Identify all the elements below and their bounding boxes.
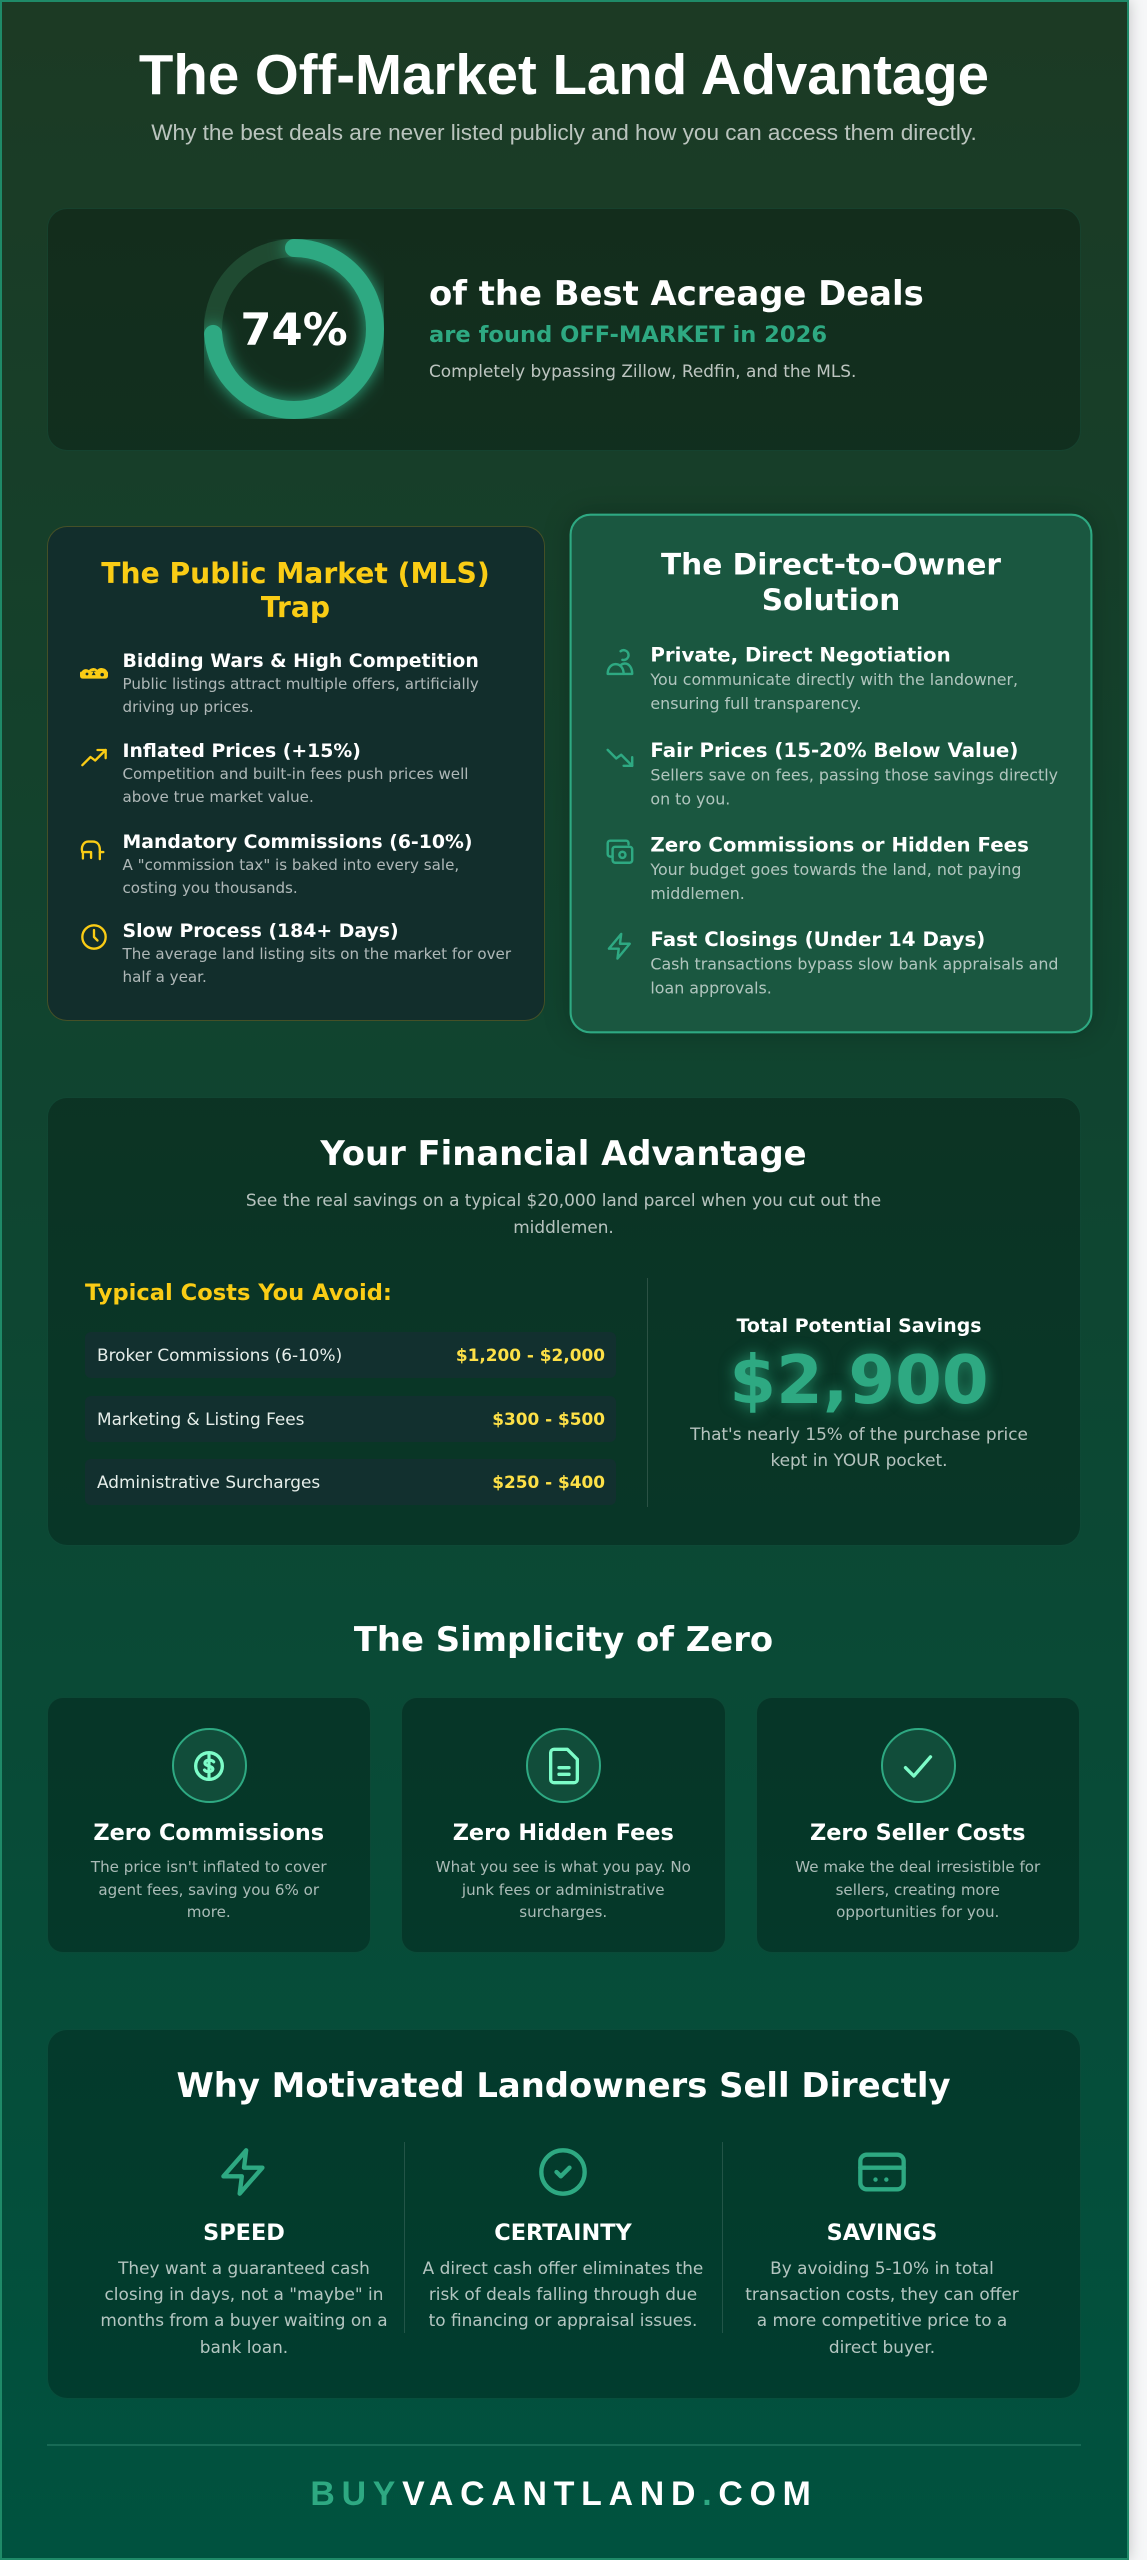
icon: commissions — [80, 840, 104, 860]
text: months from a buyer waiting on a — [100, 2310, 388, 2330]
savings figure: $2,900 — [729, 1341, 989, 1419]
row: marketing fees: Marketing & Listing Fees — [97, 1409, 304, 1429]
card text: junk fees or administrative — [462, 1881, 665, 1899]
text: Fair Prices (15-20% Below Value) — [650, 740, 1018, 762]
statistic headline: of the Best Acreage Deals — [429, 274, 924, 313]
heading: Solution — [762, 583, 900, 618]
text: transaction costs, they can offer — [745, 2284, 1019, 2304]
text — [723, 2255, 1041, 2360]
icon: trending up — [81, 748, 107, 766]
description: ensuring full transparency. — [650, 694, 861, 713]
heading: financial advantage: Your Financial Advantage — [320, 1134, 807, 1173]
savings label: Total Potential Savings — [737, 1314, 981, 1336]
description: Cash transactions bypass slow bank appraisals and — [650, 955, 1058, 974]
icon: document — [526, 1728, 601, 1803]
panel: 74 percent statistic — [46, 208, 1081, 451]
description — [650, 766, 1058, 809]
description — [122, 945, 512, 986]
text: Zero Commissions or Hidden Fees — [650, 835, 1029, 857]
card title: Zero Seller Costs — [810, 1820, 1026, 1846]
description: You communicate directly with the landowner, — [650, 670, 1018, 689]
title: CERTAINTY — [494, 2220, 632, 2246]
icon: check circle — [539, 2148, 587, 2196]
card: zero hidden fees — [401, 1697, 726, 1953]
text: Private, Direct Negotiation — [650, 645, 951, 667]
savings note: That's nearly 15% of the purchase price — [690, 1424, 1028, 1444]
row: broker commissions: Broker Commissions (6-10%) — [97, 1345, 342, 1365]
card: zero seller costs — [756, 1697, 1080, 1953]
heading: why landowners sell directly: Why Motivated Landowners Sell Directly — [176, 2066, 951, 2105]
description: costing you thousands. — [122, 879, 298, 897]
item: fair prices — [606, 740, 1058, 809]
description: Competition and built-in fees push prices well — [122, 765, 468, 783]
card title: Zero Hidden Fees — [453, 1820, 674, 1846]
card text: sellers, creating more — [836, 1881, 1000, 1899]
panel: financial advantage — [46, 1097, 1081, 1546]
icon: clock — [81, 924, 107, 950]
icon: bidding — [80, 668, 108, 679]
financial intro text: See the real savings on a typical $20,000 land parcel when you cut out the — [246, 1190, 881, 1210]
card text: The price isn't inflated to cover — [91, 1858, 327, 1876]
row: broker commissions — [85, 1332, 616, 1378]
statistic note: Completely bypassing Zillow, Redfin, and the MLS. — [429, 361, 856, 381]
text: Slow Process (184+ Days) — [122, 921, 399, 942]
card text: more. — [187, 1903, 231, 1921]
description — [650, 955, 1058, 998]
text: a more competitive price to a — [757, 2310, 1007, 2330]
statistic subheading: are found OFF-MARKET in 2026 — [429, 322, 827, 348]
financial intro text — [246, 1190, 881, 1237]
text: A direct cash offer eliminates the — [423, 2258, 703, 2278]
icon: banknotes — [606, 840, 634, 864]
description: loan approvals. — [650, 979, 772, 998]
savings note — [690, 1424, 1028, 1470]
icon: lightning — [608, 932, 631, 960]
row: admin surcharges: Administrative Surcharges — [97, 1472, 320, 1492]
heading: The Direct-to-Owner — [661, 547, 1001, 582]
text: Inflated Prices (+15%) — [122, 741, 361, 762]
card text — [90, 1858, 327, 1921]
panel: public market trap — [46, 526, 544, 1021]
heading — [661, 547, 1001, 618]
card text: surcharges. — [519, 1903, 607, 1921]
text — [422, 2258, 703, 2330]
description — [122, 856, 459, 897]
column: speed — [100, 2148, 388, 2357]
description: Sellers save on fees, passing those savings directly — [650, 766, 1058, 785]
card title: Zero Commissions — [93, 1820, 324, 1846]
card text: We make the deal irresistible for — [795, 1858, 1040, 1876]
savings note: kept in YOUR pocket. — [770, 1450, 948, 1470]
item: inflated prices — [81, 741, 468, 806]
icon: check — [880, 1728, 956, 1803]
column: savings — [745, 2152, 1019, 2357]
row: broker commissions: $1,200 - $2,000 — [456, 1345, 605, 1365]
description: driving up prices. — [122, 698, 254, 716]
heading: Trap — [261, 591, 330, 624]
subheading: costs you avoid: Typical Costs You Avoid: — [85, 1280, 392, 1306]
divider — [647, 1278, 648, 1507]
item: zero commissions — [606, 835, 1029, 903]
text: bank loan. — [200, 2337, 288, 2357]
financial intro text: middlemen. — [513, 1217, 614, 1237]
panel: why landowners sell directly — [46, 2029, 1081, 2399]
donut chart: 74%: 74% — [240, 303, 347, 356]
description: on to you. — [650, 790, 730, 809]
text: to financing or appraisal issues. — [429, 2310, 697, 2330]
text: direct buyer. — [829, 2337, 935, 2357]
text: risk of deals falling through due — [429, 2284, 697, 2304]
card text — [436, 1858, 691, 1921]
footer divider — [47, 2444, 1081, 2446]
title: SAVINGS — [827, 2220, 937, 2246]
title: SPEED — [203, 2220, 285, 2246]
icon: dollar coin — [172, 1728, 246, 1803]
description: middlemen. — [650, 884, 745, 903]
item: fast closings — [608, 929, 1058, 998]
card: zero commissions — [46, 1697, 371, 1953]
card text: agent fees, saving you 6% or — [98, 1881, 319, 1899]
description: A "commission tax" is baked into every sale, — [122, 856, 459, 874]
text: Bidding Wars & High Competition — [122, 651, 479, 672]
divider — [404, 2142, 405, 2333]
item: private negotiation — [606, 645, 1018, 713]
row: marketing fees: $300 - $500 — [492, 1409, 605, 1429]
heading — [101, 557, 490, 624]
description — [650, 670, 1018, 713]
card text: What you see is what you pay. No — [436, 1858, 691, 1876]
cost table — [85, 1332, 616, 1505]
row: admin surcharges — [85, 1459, 616, 1505]
title: The Off-Market Land Advantage — [139, 43, 989, 106]
divider — [722, 2142, 723, 2333]
item: slow process — [81, 921, 512, 986]
item: bidding wars — [80, 651, 479, 716]
column: certainty — [422, 2148, 703, 2330]
icon: trending down — [606, 748, 634, 768]
icon: lightning — [221, 2148, 265, 2196]
description — [122, 675, 479, 716]
panel: direct-to-owner solution — [570, 514, 1092, 1033]
icon: person — [606, 648, 634, 676]
card text — [795, 1858, 1040, 1921]
text: By avoiding 5-10% in total — [770, 2258, 994, 2278]
description — [122, 765, 468, 806]
footer logo: BUYVACANTLAND.COM — [310, 2475, 818, 2513]
text: Mandatory Commissions (6-10%) — [122, 832, 472, 853]
description: above true market value. — [122, 788, 314, 806]
text: They want a guaranteed cash — [118, 2258, 370, 2278]
row: admin surcharges: $250 - $400 — [492, 1472, 605, 1492]
text: Fast Closings (Under 14 Days) — [650, 929, 985, 951]
description: The average land listing sits on the market for over — [122, 945, 511, 963]
donut chart: 74% — [204, 239, 384, 419]
item: mandatory commissions — [80, 832, 472, 897]
text: closing in days, not a "maybe" in — [105, 2284, 383, 2304]
text — [100, 2258, 388, 2357]
icon: card — [856, 2146, 908, 2198]
subtitle: Why the best deals are never listed publicly and how you can access them directly. — [151, 120, 977, 145]
card text: opportunities for you. — [836, 1903, 999, 1921]
description: half a year. — [122, 968, 207, 986]
row: marketing fees — [85, 1396, 616, 1442]
heading: simplicity of zero: The Simplicity of Zero — [354, 1620, 773, 1659]
description: Public listings attract multiple offers, artificially — [122, 675, 479, 693]
description — [650, 860, 1021, 903]
heading: The Public Market (MLS) — [101, 557, 490, 590]
description: Your budget goes towards the land, not paying — [650, 860, 1021, 879]
